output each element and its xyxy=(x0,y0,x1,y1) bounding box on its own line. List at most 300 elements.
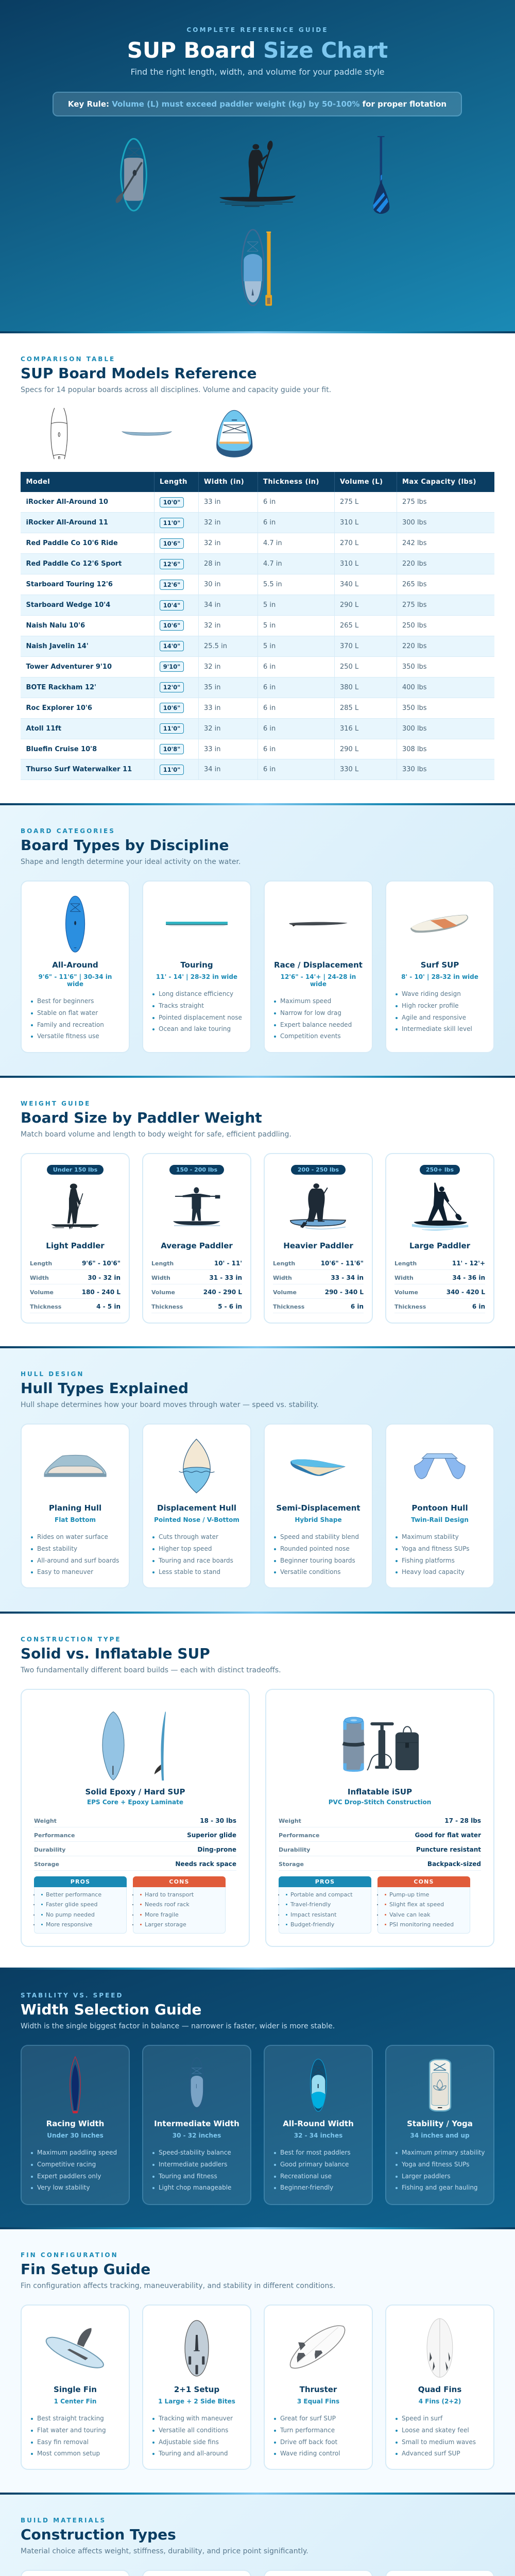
card: pontoon hull: Fishing platforms xyxy=(402,1557,455,1564)
card: average paddler xyxy=(142,1153,251,1324)
card: fiberglass xyxy=(385,2570,494,2576)
comparison rows: Needs rack space xyxy=(175,1860,236,1868)
section: board types xyxy=(0,805,515,1076)
comparison rows xyxy=(279,1817,481,1871)
table: board models: 380 L xyxy=(340,684,358,691)
pros list: Portable and compact xyxy=(290,1891,353,1898)
table: board models: 310 L xyxy=(340,560,358,568)
comparison rows: Durability xyxy=(34,1846,65,1853)
section: hull types xyxy=(0,1348,515,1612)
table: board models: 9'10" xyxy=(163,663,180,670)
card: heavier paddler xyxy=(264,1153,373,1324)
table: board models: 4.7 in xyxy=(263,560,282,568)
heading: board types: Shape and length determine your ideal activity on the water. xyxy=(21,858,241,866)
card: race xyxy=(264,880,373,1053)
cons list: CONS xyxy=(414,1878,434,1885)
table: board models: 10'6" xyxy=(163,622,180,629)
table: board models: 308 lbs xyxy=(402,745,427,753)
specs rows: 10'6" - 11'6" xyxy=(321,1260,364,1267)
heading: hull types: HULL DESIGN xyxy=(21,1370,84,1378)
card: intermediate width: Intermediate paddlers xyxy=(159,2161,227,2168)
heading: construction types: Material choice affects weight, stiffness, durability, and price point significantly. xyxy=(21,2547,308,2555)
pros list: Faster glide speed xyxy=(46,1901,97,1908)
card: race: Race / Displacement xyxy=(274,960,363,970)
table: board models: 330 lbs xyxy=(402,766,427,773)
card: surf: Agile and responsive xyxy=(402,1014,466,1021)
table: board models: 290 L xyxy=(340,745,358,753)
weight badge: 250+ lbs xyxy=(426,1166,454,1173)
card: planing hull: Flat Bottom xyxy=(55,1516,96,1523)
cons list: Hard to transport xyxy=(145,1891,194,1898)
specs rows: Length xyxy=(30,1260,52,1267)
card: pontoon hull: Heavy load capacity xyxy=(402,1568,465,1575)
table: board models: 6 in xyxy=(263,684,276,691)
table: board models: Tower Adventurer 9'10 xyxy=(26,663,112,671)
heading: models reference: SUP Board Models Reference xyxy=(21,365,256,382)
weight badge xyxy=(291,1165,346,1175)
card: all-round width: 32 - 34 inches xyxy=(294,2132,342,2139)
card: thruster: Drive off back foot xyxy=(280,2438,337,2446)
card: intermediate width: Speed-stability balance xyxy=(159,2149,231,2156)
panel subtitle: PVC Drop-Stitch Construction xyxy=(329,1799,431,1806)
icon: single fin board xyxy=(45,2328,104,2368)
card: quad fins: Speed in surf xyxy=(402,2415,442,2422)
specs rows xyxy=(394,1260,485,1313)
card: stability yoga xyxy=(385,2045,494,2205)
card: quad fins xyxy=(385,2304,494,2470)
card: surf: Surf SUP xyxy=(421,960,459,970)
icon: planing hull xyxy=(44,1455,107,1477)
table: board models: 250 lbs xyxy=(402,622,427,630)
card: stability yoga: Larger paddlers xyxy=(402,2173,451,2180)
card: 2+1 setup: Tracking with maneuver xyxy=(159,2415,233,2422)
table: board models: 12'6" xyxy=(163,561,180,568)
specs rows: 11' - 12'+ xyxy=(452,1260,485,1267)
panel subtitle: EPS Core + Epoxy Laminate xyxy=(87,1799,183,1806)
card: race: Expert balance needed xyxy=(280,1021,352,1028)
board diagrams xyxy=(50,408,252,460)
table: board models: 350 lbs xyxy=(402,663,427,671)
table: board models: Red Paddle Co 10'6 Ride xyxy=(26,539,118,547)
icon: semi-displacement hull xyxy=(290,1459,346,1476)
comparison rows: Storage xyxy=(279,1861,304,1868)
card: intermediate width: Touring and fitness xyxy=(159,2173,217,2180)
table: board models: 12'0" xyxy=(163,684,180,691)
cons list: CONS xyxy=(169,1878,190,1885)
specs rows xyxy=(151,1260,242,1313)
table: board models: 220 lbs xyxy=(402,560,427,568)
section: paddler weight xyxy=(0,1078,515,1346)
specs rows: 9'6" - 10'6" xyxy=(82,1260,121,1267)
card: displacement hull: Cuts through water xyxy=(159,1533,218,1540)
table: board models: 370 L xyxy=(340,642,358,650)
specs rows: Thickness xyxy=(151,1303,183,1310)
card: touring: 11' - 14' | 28-32 in wide xyxy=(156,973,237,980)
specs rows: Thickness xyxy=(30,1303,61,1310)
card: surf: 8' - 10' | 28-32 in wide xyxy=(401,973,478,980)
table: board models: 34 in xyxy=(204,766,221,773)
heading: width guide: STABILITY VS. SPEED xyxy=(21,1992,123,1999)
specs rows xyxy=(273,1260,364,1313)
card: displacement hull xyxy=(142,1423,251,1588)
card: single fin: Most common setup xyxy=(37,2450,100,2457)
table: board models: 275 lbs xyxy=(402,498,427,506)
table: board models: Thickness (in) xyxy=(263,478,319,486)
weight badge xyxy=(420,1165,460,1175)
comparison rows: Performance xyxy=(34,1832,75,1839)
card: racing width: Competitive racing xyxy=(37,2161,96,2168)
table: board models: 10'6" xyxy=(163,704,180,711)
icon: board outline xyxy=(51,408,67,459)
table: board models: 12'6" xyxy=(163,581,180,588)
table: board models: Red Paddle Co 12'6 Sport xyxy=(26,560,122,568)
card: light paddler xyxy=(21,1153,130,1324)
specs rows: Width xyxy=(273,1275,292,1281)
card: semi-displacement: Semi-Displacement xyxy=(276,1503,360,1513)
hero banner xyxy=(0,0,515,331)
table: board models: Naish Nalu 10'6 xyxy=(26,622,85,630)
table: board models: 14'0" xyxy=(163,642,180,650)
table: board models: 250 L xyxy=(340,663,358,671)
card: stability yoga: Yoga and fitness SUPs xyxy=(402,2161,470,2168)
card: single fin: Best straight tracking xyxy=(37,2415,104,2422)
card: 2+1 setup: 2+1 Setup xyxy=(174,2385,219,2394)
icon: light paddler silhouette xyxy=(51,1183,99,1229)
pros list: PROS xyxy=(71,1878,90,1885)
pros list: Travel-friendly xyxy=(290,1901,331,1908)
card: pontoon hull xyxy=(385,1423,494,1588)
table: board models: Length xyxy=(160,478,187,486)
card: planing hull: Best stability xyxy=(37,1545,77,1552)
table: board models: 10'8" xyxy=(163,745,180,753)
table: board models: 400 lbs xyxy=(402,684,427,691)
cons list: PSI monitoring needed xyxy=(389,1921,454,1928)
table: board models: 30 in xyxy=(204,581,221,588)
specs rows: 180 - 240 L xyxy=(82,1289,121,1296)
card: pontoon hull: Yoga and fitness SUPs xyxy=(402,1545,470,1552)
card: race: Maximum speed xyxy=(280,997,331,1005)
section: solid vs inflatable xyxy=(0,1614,515,1968)
pros list: More responsive xyxy=(46,1921,92,1928)
comparison rows: Performance xyxy=(279,1832,319,1839)
specs rows: 31 - 33 in xyxy=(209,1274,242,1281)
card: racing width: Racing Width xyxy=(46,2119,104,2128)
card: stability yoga: Stability / Yoga xyxy=(407,2119,473,2128)
table: board models: 6 in xyxy=(263,519,276,527)
table: board models: 330 L xyxy=(340,766,358,773)
specs rows: 340 - 420 L xyxy=(447,1289,485,1296)
card: touring: Pointed displacement nose xyxy=(159,1014,242,1021)
icon: 2+1 fin board xyxy=(184,2320,209,2377)
hero eyebrow: COMPLETE REFERENCE GUIDE xyxy=(186,26,329,33)
card: all-around: All-Around xyxy=(52,960,98,970)
heading: solid vs inflatable xyxy=(21,1636,281,1674)
table: board models: 270 L xyxy=(340,539,358,547)
card: racing width: Maximum paddling speed xyxy=(37,2149,117,2156)
card: large paddler xyxy=(385,1153,494,1324)
card: semi-displacement: Beginner touring boards xyxy=(280,1557,355,1564)
card: race: Narrow for low drag xyxy=(280,1009,341,1016)
card: pontoon hull: Maximum stability xyxy=(402,1533,459,1540)
card: single fin: Easy fin removal xyxy=(37,2438,89,2446)
icon: solid board front and side xyxy=(102,1711,166,1781)
card: planing hull: Planing Hull xyxy=(49,1503,101,1513)
table: board models: 11'0" xyxy=(163,766,180,773)
pros list: Better performance xyxy=(46,1891,101,1898)
comparison rows xyxy=(34,1817,236,1871)
heading: width guide: Width Selection Guide xyxy=(21,2001,201,2018)
table: board models: iRocker All-Around 10 xyxy=(26,498,108,506)
table: board models: 28 in xyxy=(204,560,221,568)
card: race: Competition events xyxy=(280,1032,341,1040)
panel title: Inflatable iSUP xyxy=(348,1787,412,1796)
comparison rows: Backpack-sized xyxy=(427,1860,481,1868)
main title: SUP Board Size Chart xyxy=(127,38,388,63)
card: racing width: Very low stability xyxy=(37,2184,90,2191)
card: pontoon hull: Pontoon Hull xyxy=(411,1503,468,1513)
table: board models: 316 L xyxy=(340,725,358,733)
heading: models reference: Specs for 14 popular boards across all disciplines. Volume and capacity guide your fit. xyxy=(21,386,331,394)
heading: fin setup: Fin configuration affects tracking, maneuverability, and stability in different conditions. xyxy=(21,2282,335,2290)
table: board models: 310 L xyxy=(340,519,358,527)
weight badge xyxy=(47,1165,104,1175)
icon: board nose perspective xyxy=(216,410,252,457)
card: racing width xyxy=(21,2045,130,2205)
table: board models: 6 in xyxy=(263,745,276,753)
specs rows: 6 in xyxy=(472,1303,485,1310)
card: all-round width: Recreational use xyxy=(280,2173,332,2180)
heading: construction types: BUILD MATERIALS xyxy=(21,2517,106,2524)
table: board models: 35 in xyxy=(204,684,221,691)
table: board models: 6 in xyxy=(263,725,276,733)
card: displacement hull: Less stable to stand xyxy=(159,1568,220,1575)
card: surf xyxy=(385,880,494,1053)
table: board models: 4.7 in xyxy=(263,539,282,547)
specs rows: Length xyxy=(273,1260,295,1267)
icon: yoga board xyxy=(428,2059,451,2112)
specs rows: Thickness xyxy=(273,1303,304,1310)
specs rows: Width xyxy=(394,1275,414,1281)
card: all-round width xyxy=(264,2045,373,2205)
table: board models: 242 lbs xyxy=(402,539,427,547)
table: board models: 265 L xyxy=(340,622,358,630)
pros list xyxy=(34,1876,127,1933)
table: board models: Bluefin Cruise 10'8 xyxy=(26,745,97,753)
card: surf: Wave riding design xyxy=(402,990,461,997)
table: board models: 32 in xyxy=(204,663,221,671)
specs rows: 33 - 34 in xyxy=(331,1274,364,1281)
icon: teal board with paddle xyxy=(116,139,146,211)
heading: board types: Board Types by Discipline xyxy=(21,837,229,854)
specs rows: Volume xyxy=(394,1289,418,1296)
card: touring: Touring xyxy=(180,960,213,970)
card: single fin: Single Fin xyxy=(54,2385,97,2394)
card: all-round width: Good primary balance xyxy=(280,2161,349,2168)
specs rows: Length xyxy=(151,1260,174,1267)
table: board models: Max Capacity (lbs) xyxy=(402,478,476,486)
card: touring xyxy=(142,880,251,1053)
heading: models reference xyxy=(21,355,331,394)
card: displacement hull: Pointed Nose / V-Bottom xyxy=(154,1516,239,1523)
heading: models reference: COMPARISON TABLE xyxy=(21,355,115,363)
card: thruster: 3 Equal Fins xyxy=(297,2398,339,2405)
card: thruster: Great for surf SUP xyxy=(280,2415,336,2422)
card: all-around: Best for beginners xyxy=(37,997,94,1005)
card: all-around: Versatile fitness use xyxy=(37,1032,99,1040)
icon: carbon paddle xyxy=(373,136,389,214)
heading: hull types xyxy=(21,1370,319,1409)
heading: construction types: Construction Types xyxy=(21,2526,176,2543)
comparison rows: 18 - 30 lbs xyxy=(200,1817,236,1824)
specs rows: Volume xyxy=(151,1289,175,1296)
icon: board side profile xyxy=(122,432,171,436)
table: board models: 5 in xyxy=(263,601,276,609)
icon: touring side profile xyxy=(166,922,228,926)
icon: rolled board pump and bag xyxy=(342,1717,419,1772)
panel: solid epoxy xyxy=(21,1689,250,1947)
specs rows: 290 - 340 L xyxy=(325,1289,364,1296)
comparison rows: Durability xyxy=(279,1846,310,1853)
comparison rows: Weight xyxy=(279,1818,301,1824)
card: thruster xyxy=(264,2304,373,2470)
card: touring: Tracks straight xyxy=(159,1002,204,1009)
specs rows: Thickness xyxy=(394,1303,426,1310)
pros list: Impact resistant xyxy=(290,1911,336,1918)
table: board models: iRocker All-Around 11 xyxy=(26,519,108,527)
card: semi-displacement xyxy=(264,1423,373,1588)
card: touring: Long distance efficiency xyxy=(159,990,233,997)
heading: paddler weight: WEIGHT GUIDE xyxy=(21,1100,91,1107)
card: thruster: Thruster xyxy=(300,2385,337,2394)
card: 2+1 setup xyxy=(142,2304,251,2470)
table: board models: 6 in xyxy=(263,663,276,671)
heading: paddler weight: Match board volume and length to body weight for safe, efficient paddling. xyxy=(21,1130,291,1139)
table: board models: 300 lbs xyxy=(402,519,427,527)
section: construction types xyxy=(0,2495,515,2576)
table: board models: 10'4" xyxy=(163,602,180,609)
cons list xyxy=(377,1876,470,1933)
panel title: Solid Epoxy / Hard SUP xyxy=(85,1787,185,1796)
heading: fin setup: FIN CONFIGURATION xyxy=(21,2251,118,2259)
table: board models: 32 in xyxy=(204,622,221,630)
icon: race board profile xyxy=(289,922,348,926)
comparison rows: Ding-prone xyxy=(197,1846,236,1853)
card: quad fins: 4 Fins (2+2) xyxy=(419,2398,461,2405)
card: single fin xyxy=(21,2304,130,2470)
cons list: Larger storage xyxy=(145,1921,186,1928)
heading: fin setup xyxy=(21,2251,335,2290)
specs rows: 240 - 290 L xyxy=(203,1289,242,1296)
section: models table xyxy=(0,333,515,803)
heading: width guide xyxy=(21,1992,335,2030)
section: fin setup xyxy=(0,2229,515,2493)
comparison rows: 17 - 28 lbs xyxy=(444,1817,481,1824)
card: all-round width: Best for most paddlers xyxy=(280,2149,351,2156)
heading: paddler weight: Board Size by Paddler Weight xyxy=(21,1109,262,1126)
icon: intermediate board xyxy=(190,2058,204,2112)
heading: hull types: Hull Types Explained xyxy=(21,1380,188,1397)
table: board models: Model xyxy=(26,478,50,486)
comparison rows: Superior glide xyxy=(187,1832,236,1839)
icon: paddler silhouette xyxy=(219,141,296,207)
paddler title: Heavier Paddler xyxy=(283,1241,353,1250)
table: board models: 33 in xyxy=(204,704,221,712)
icon: all-round board xyxy=(310,2059,327,2112)
specs rows: 10' - 11' xyxy=(214,1260,242,1267)
table: board models: 5 in xyxy=(263,642,276,650)
table: board models xyxy=(21,472,494,780)
table: board models: 11'0" xyxy=(163,725,180,732)
subtitle: Find the right length, width, and volume for your paddle style xyxy=(130,67,385,77)
table: board models: Volume (L) xyxy=(340,478,383,486)
table: board models: 6 in xyxy=(263,704,276,712)
specs rows: 30 - 32 in xyxy=(88,1274,121,1281)
heading: width guide: Width is the single biggest factor in balance — narrower is faster, wider is more stable. xyxy=(21,2022,335,2030)
table: board models: 10'6" xyxy=(163,540,180,547)
card: displacement hull: Displacement Hull xyxy=(157,1503,236,1513)
table: board models: 25.5 in xyxy=(204,642,227,650)
card: all-around: Stable on flat water xyxy=(37,1009,98,1016)
table: board models: Starboard Wedge 10'4 xyxy=(26,601,110,609)
weight badge: 200 - 250 lbs xyxy=(298,1166,339,1173)
cons list: Pump-up time xyxy=(389,1891,429,1898)
heading: hull types: Hull shape determines how your board moves through water — speed vs. stability. xyxy=(21,1401,319,1409)
pros list: PROS xyxy=(315,1878,335,1885)
card: stability yoga: Fishing and gear hauling xyxy=(402,2184,478,2191)
card: thruster: Turn performance xyxy=(280,2427,335,2434)
card: semi-displacement: Speed and stability blend xyxy=(280,1533,359,1540)
table: board models: 340 L xyxy=(340,581,358,588)
table: board models: 275 lbs xyxy=(402,601,427,609)
icon: heavier paddler silhouette xyxy=(289,1183,346,1229)
card: pvc drop-stitch xyxy=(142,2570,251,2576)
card: 2+1 setup: 1 Large + 2 Side Bites xyxy=(158,2398,235,2405)
table: board models: 220 lbs xyxy=(402,642,427,650)
card: stability yoga: Maximum primary stability xyxy=(402,2149,485,2156)
card: touring: Ocean and lake touring xyxy=(159,1025,231,1032)
card: quad fins: Loose and skatey feel xyxy=(402,2427,469,2434)
heading: fin setup: Fin Setup Guide xyxy=(21,2261,150,2278)
card: racing width: Under 30 inches xyxy=(47,2132,104,2139)
paddler title: Large Paddler xyxy=(409,1241,470,1250)
card: 2+1 setup: Adjustable side fins xyxy=(159,2438,219,2446)
card: 2+1 setup: Versatile all conditions xyxy=(159,2427,228,2434)
heading: solid vs inflatable: Two fundamentally different board builds — each with distinct tradeoffs. xyxy=(21,1666,281,1674)
card: intermediate width: Intermediate Width xyxy=(154,2119,239,2128)
card: intermediate width: 30 - 32 inches xyxy=(173,2132,221,2139)
comparison rows: Weight xyxy=(34,1818,57,1824)
card: race: 12'6" - 14'+ | 24-28 in wide xyxy=(281,973,356,987)
cons list: Needs roof rack xyxy=(145,1901,190,1908)
card: surf: High rocker profile xyxy=(402,1002,459,1009)
table: board models: 275 L xyxy=(340,498,358,506)
cons list: Valve can leak xyxy=(389,1911,430,1918)
table: board models: Thurso Surf Waterwalker 11 xyxy=(26,766,132,773)
cons list: More fragile xyxy=(145,1911,179,1918)
card: all-around xyxy=(21,880,130,1053)
card: pontoon hull: Twin-Rail Design xyxy=(411,1516,469,1523)
icon: surf board xyxy=(410,915,469,933)
card: 2+1 setup: Touring and all-around xyxy=(159,2450,228,2457)
heading: board types: BOARD CATEGORIES xyxy=(21,827,115,835)
card: all-around: 9'6" - 11'6" | 30-34 in wide xyxy=(39,973,112,987)
table: board models: 300 lbs xyxy=(402,725,427,733)
table: board models: Naish Javelin 14' xyxy=(26,642,89,650)
card: planing hull: Rides on water surface xyxy=(37,1533,108,1540)
card: carbon fiber xyxy=(264,2570,373,2576)
specs rows: 34 - 36 in xyxy=(452,1274,485,1281)
table: board models: 33 in xyxy=(204,498,221,506)
